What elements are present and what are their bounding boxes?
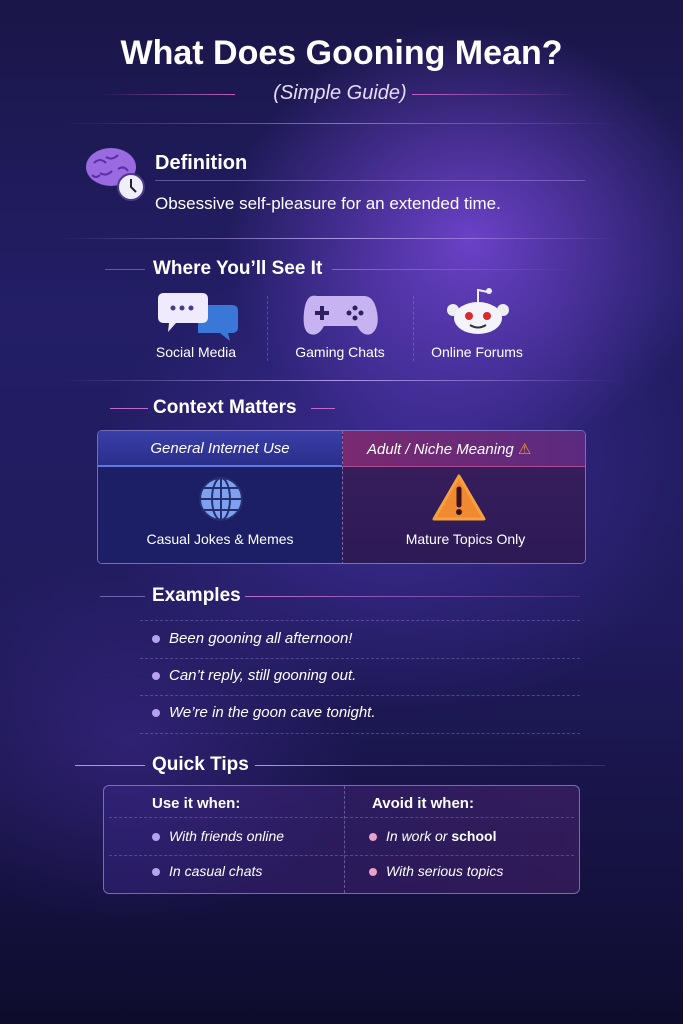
heading: examples: Examples bbox=[152, 585, 241, 606]
panel: definition bbox=[86, 148, 585, 213]
list: examples: Can’t reply, still gooning out. bbox=[169, 667, 356, 684]
column: use it when: In casual chats bbox=[169, 863, 262, 879]
heading: context matters: Context Matters bbox=[153, 397, 297, 418]
definition text: Obsessive self-pleasure for an extended time. bbox=[155, 194, 501, 213]
column: adult: Mature Topics Only bbox=[406, 531, 525, 547]
column: general bbox=[98, 431, 342, 565]
label: Social Media bbox=[156, 344, 236, 360]
column: avoid it when: In work or school bbox=[386, 828, 496, 844]
column: adult: Adult / Niche Meaning ⚠ bbox=[367, 441, 531, 458]
column: use it when: With friends online bbox=[169, 828, 284, 844]
column: avoid it when: With serious topics bbox=[386, 863, 503, 879]
icon: gamepad bbox=[304, 296, 378, 335]
heading: quick tips: Quick Tips bbox=[152, 754, 249, 775]
label: Online Forums bbox=[431, 344, 523, 360]
icon: forum robot bbox=[447, 288, 509, 334]
icon: globe bbox=[199, 477, 243, 521]
column: general: Casual Jokes & Memes bbox=[146, 531, 294, 547]
icon: brain with clock bbox=[86, 148, 145, 201]
column: adult bbox=[342, 431, 587, 565]
icon: chat bubbles bbox=[158, 293, 238, 341]
column: use it when: Use it when: bbox=[152, 795, 240, 812]
subtitle: (Simple Guide) bbox=[273, 82, 407, 104]
list: examples: We’re in the goon cave tonight. bbox=[169, 704, 376, 721]
column: use it when bbox=[152, 795, 284, 879]
heading: definition: Definition bbox=[155, 152, 247, 174]
heading: where: Where You’ll See It bbox=[153, 258, 322, 279]
label: Gaming Chats bbox=[295, 344, 385, 360]
column: avoid it when bbox=[369, 795, 504, 879]
list: examples bbox=[140, 620, 580, 734]
icon: warning bbox=[432, 474, 486, 520]
panel: quick tips table bbox=[103, 785, 580, 894]
title: What Does Gooning Mean? bbox=[120, 34, 562, 72]
panel: where you'll see it bbox=[105, 258, 547, 361]
list: examples: Been gooning all afternoon! bbox=[169, 630, 352, 647]
column: general: General Internet Use bbox=[150, 440, 290, 457]
panel: context table bbox=[97, 430, 586, 564]
column: avoid it when: Avoid it when: bbox=[372, 795, 474, 812]
